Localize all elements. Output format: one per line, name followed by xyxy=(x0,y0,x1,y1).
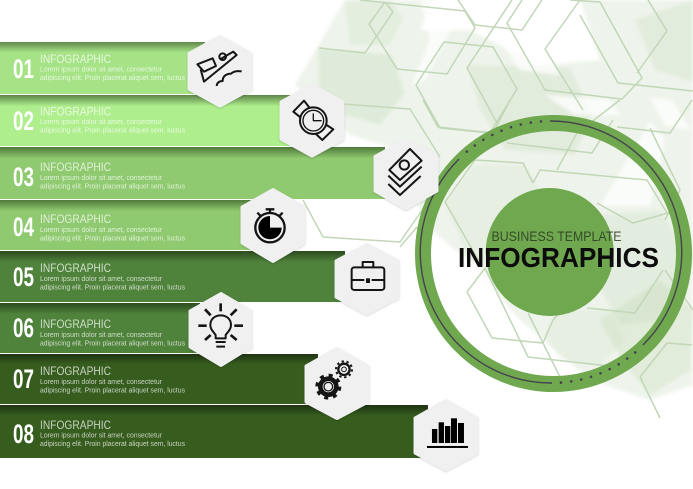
bar 07: Lorem ipsum dolor sit amet, consectetur xyxy=(40,379,163,386)
bar 01 xyxy=(0,42,205,94)
bar 05: adipiscing elit. Proin placerat aliquet sem, luctus xyxy=(40,284,185,292)
bar 02: 02 xyxy=(13,106,34,136)
bar 05 xyxy=(0,251,345,302)
bar 07: 07 xyxy=(13,364,34,394)
bar 04: 04 xyxy=(13,212,34,242)
bar 06: 06 xyxy=(13,313,34,343)
bar 03: 03 xyxy=(13,162,34,192)
bar 08 xyxy=(0,405,428,458)
bar 01: adipiscing elit. Proin placerat aliquet sem, luctus xyxy=(40,75,185,82)
bar 04: INFOGRAPHIC xyxy=(40,212,111,226)
title: INFOGRAPHICS xyxy=(458,242,659,273)
bar 07: INFOGRAPHIC xyxy=(40,364,111,378)
hexagon icon 01: skier xyxy=(189,36,251,106)
bar 04: adipiscing elit. Proin placerat aliquet sem, luctus xyxy=(40,236,185,242)
bar 03: INFOGRAPHIC xyxy=(40,160,111,174)
hexagon icon 05: briefcase xyxy=(336,244,398,314)
bar 07: adipiscing elit. Proin placerat aliquet sem, luctus xyxy=(40,388,185,394)
bar 02: adipiscing elit. Proin placerat aliquet sem, luctus xyxy=(40,128,185,134)
hexagon icon 08: bar chart xyxy=(415,400,477,470)
hexagon icon 07: gears xyxy=(306,348,368,418)
bar 02: INFOGRAPHIC xyxy=(40,104,111,118)
subtitle: BUSINESS TEMPLATE xyxy=(492,229,622,244)
hexagon icon 06: light bulb xyxy=(190,294,251,366)
bar 04 xyxy=(0,200,252,250)
bar 06: adipiscing elit. Proin placerat aliquet sem, luctus xyxy=(40,340,185,348)
hexagon icon 04: stopwatch xyxy=(242,190,304,262)
bar 05: 05 xyxy=(13,262,34,292)
bar 01: 01 xyxy=(13,54,34,84)
bar 05: INFOGRAPHIC xyxy=(40,261,111,275)
hexagon outlines xyxy=(303,0,693,418)
panel: stacked bars xyxy=(0,42,428,458)
bar 08: 08 xyxy=(13,419,34,449)
pale hexagon fills xyxy=(295,0,693,400)
bar 02 xyxy=(0,95,292,146)
bar 07 xyxy=(0,354,318,404)
bar 08: INFOGRAPHIC xyxy=(40,418,111,432)
central circle badge xyxy=(420,120,684,384)
bar 08: adipiscing elit. Proin placerat aliquet sem, luctus xyxy=(40,441,185,448)
inner green disc xyxy=(486,188,614,316)
bar 02: Lorem ipsum dolor sit amet, consectetur xyxy=(40,119,163,126)
hexagon icon 02: watch xyxy=(281,85,343,156)
bar 06: Lorem ipsum dolor sit amet, consectetur xyxy=(40,332,163,339)
hexagon icon 03: banknotes xyxy=(375,140,437,208)
white light streaks xyxy=(412,0,690,375)
bar 03 xyxy=(0,147,385,199)
bar 05: Lorem ipsum dolor sit amet, consectetur xyxy=(40,276,163,283)
bar 04: Lorem ipsum dolor sit amet, consectetur xyxy=(40,227,163,234)
bar 06: INFOGRAPHIC xyxy=(40,317,111,331)
bar 01: Lorem ipsum dolor sit amet, consectetur xyxy=(40,66,163,74)
bar 01: INFOGRAPHIC xyxy=(40,52,111,66)
bar 03: adipiscing elit. Proin placerat aliquet sem, luctus xyxy=(40,184,185,190)
dotted accents xyxy=(466,120,636,384)
bar 06 xyxy=(0,303,200,353)
bar 03: Lorem ipsum dolor sit amet, consectetur xyxy=(40,175,163,182)
background: hexagon pattern xyxy=(295,0,693,418)
dark inner arcs xyxy=(420,121,682,383)
bar 08: Lorem ipsum dolor sit amet, consectetur xyxy=(40,432,163,440)
outer green ring xyxy=(423,123,684,384)
